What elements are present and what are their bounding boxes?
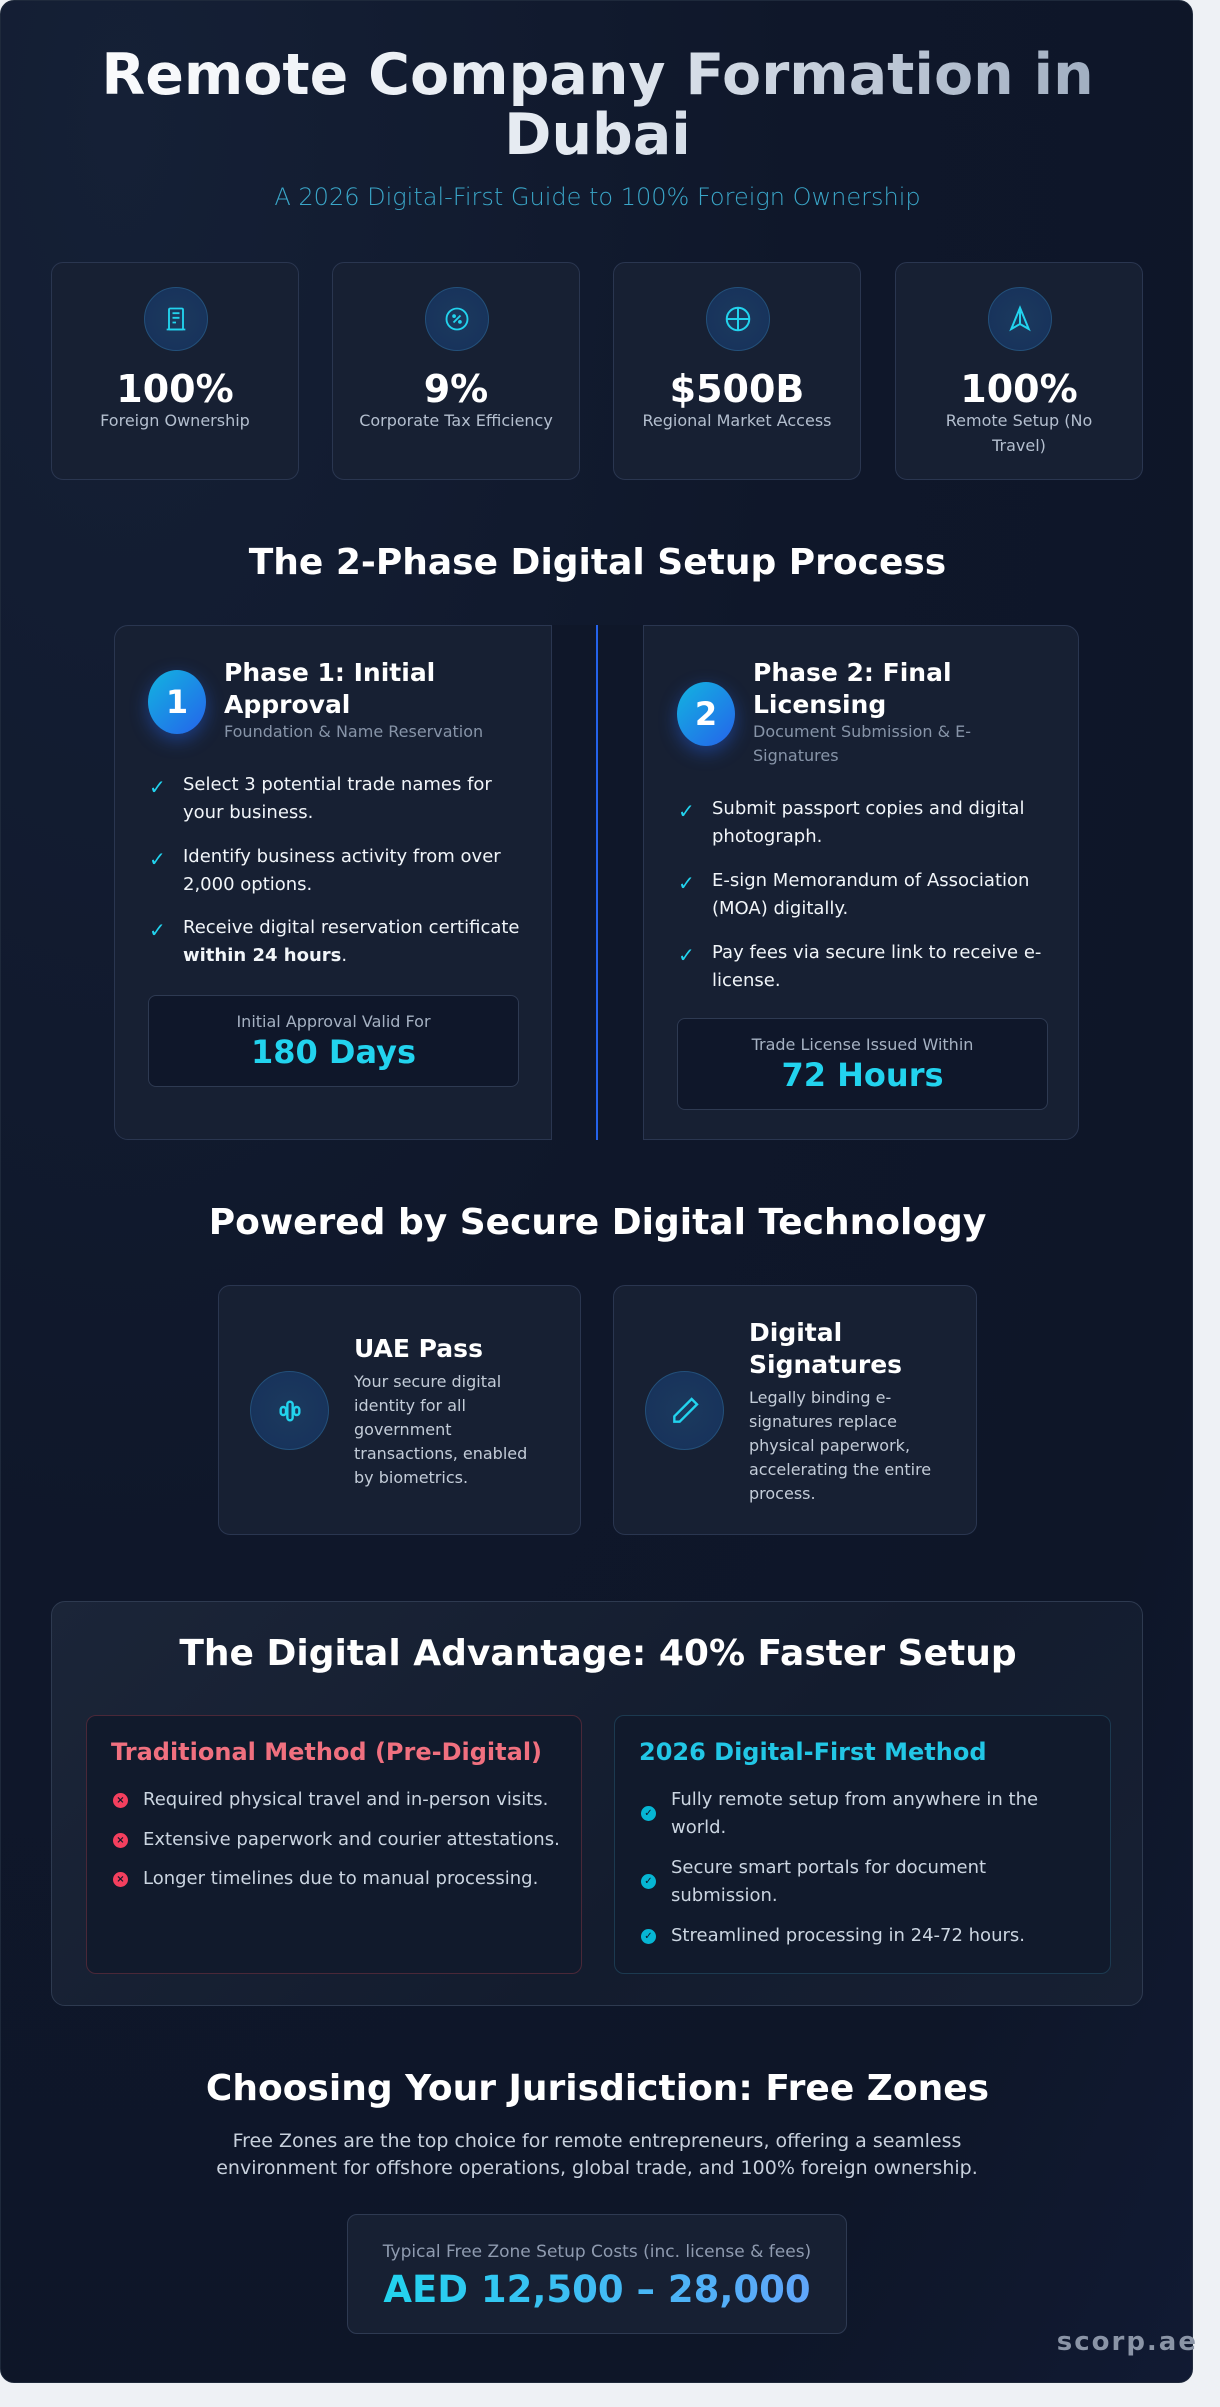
phase 1 heading: Approval xyxy=(224,690,350,719)
callout: 180 days: Initial Approval Valid For xyxy=(236,1012,431,1031)
watermark: scorp.ae xyxy=(1057,2327,1198,2357)
stat: foreign ownership: 100% xyxy=(116,367,234,411)
digital-first xyxy=(614,1715,1111,1974)
title: Remote Company Formation in xyxy=(101,42,1094,108)
panel: digital signatures: Digital xyxy=(749,1318,842,1347)
panel: phase 1: ✓ xyxy=(149,775,166,799)
icon: percent xyxy=(425,287,489,351)
traditional: × xyxy=(116,1835,125,1846)
panel: UAE Pass: Your secure digital identity for all government transactions, enabled by biometrics. xyxy=(354,1372,527,1487)
digital-first: 2026 Digital-First Method xyxy=(639,1738,987,1766)
badge 2 xyxy=(677,682,735,746)
panel: digital signatures xyxy=(613,1285,977,1535)
callout: 72 hours: Trade License Issued Within xyxy=(752,1035,973,1054)
stat: market: $500B xyxy=(670,367,804,411)
panel: digital signatures: Legally binding e-signatures replace physical paperwork, accelerating the entire process. xyxy=(749,1388,931,1503)
stat: remote xyxy=(895,262,1143,480)
phase 1 heading: Phase 1: Initial xyxy=(224,658,435,687)
timeline line xyxy=(552,625,643,1140)
panel: UAE Pass: UAE Pass xyxy=(354,1334,483,1363)
badge 1 xyxy=(148,670,206,734)
stat: remote: 100% xyxy=(960,367,1078,411)
panel: phase 2: E-sign Memorandum of Association (MOA) digitally. xyxy=(712,870,1029,919)
panel: digital signatures: Signatures xyxy=(749,1350,902,1379)
panel: digital advantage xyxy=(51,1601,1143,2006)
paragraph: Free Zones are the top choice for remote entrepreneurs, offering a seamless environment for offshore operations, global trade, and 100% foreign ownership. xyxy=(216,2130,978,2179)
stat: foreign ownership xyxy=(51,262,299,480)
traditional: × xyxy=(116,1874,125,1885)
icon: building xyxy=(144,287,208,351)
stat: market xyxy=(613,262,861,480)
callout: costs: Typical Free Zone Setup Costs (inc. license & fees) xyxy=(383,2242,811,2262)
panel: phase 1 xyxy=(114,625,552,1140)
heading: The Digital Advantage: 40% Faster Setup xyxy=(179,1633,1017,1674)
phase 2 heading: Licensing xyxy=(753,690,886,719)
panel: phase 1: Identify business activity from over 2,000 options. xyxy=(183,846,501,895)
digital-first: ✓ xyxy=(644,1876,653,1887)
phase 2 heading xyxy=(753,658,952,719)
panel: phase 2 xyxy=(643,625,1079,1140)
bullets: Select 3 potential trade names for your business. xyxy=(183,774,492,823)
digital-first: ✓ xyxy=(644,1808,653,1819)
phase 1 heading xyxy=(224,658,435,719)
title: Dubai xyxy=(504,102,691,168)
traditional: × xyxy=(116,1795,125,1806)
icon: pen xyxy=(645,1371,724,1450)
title xyxy=(1,45,1194,165)
badge 2: 2 xyxy=(695,695,717,733)
icon: plane xyxy=(988,287,1052,351)
heading: free zones: Choosing Your Jurisdiction: Free Zones xyxy=(206,2068,989,2109)
callout: 180 days: 180 Days xyxy=(251,1033,416,1071)
traditional: Extensive paperwork and courier attestations. xyxy=(143,1829,560,1850)
callout: costs xyxy=(347,2214,847,2334)
traditional: Traditional Method (Pre-Digital) xyxy=(111,1738,542,1766)
panel: phase 2: ✓ xyxy=(678,943,695,967)
callout: 72 hours: 72 Hours xyxy=(781,1056,944,1094)
phase 2 heading: Phase 2: Final xyxy=(753,658,952,687)
panel: phase 2: Pay fees via secure link to receive e-license. xyxy=(712,942,1041,991)
heading: 2-phase: The 2-Phase Digital Setup Process xyxy=(249,542,946,583)
subtitle: A 2026 Digital-First Guide to 100% Foreign Ownership xyxy=(274,183,921,211)
stat: tax: Corporate Tax Efficiency xyxy=(359,411,553,430)
panel: phase 1: ✓ xyxy=(149,918,166,942)
callout: 180 days xyxy=(148,995,519,1087)
digital-first: ✓ xyxy=(644,1931,653,1942)
panel: phase 2: ✓ xyxy=(678,871,695,895)
panel: phase 1: Receive digital reservation certificate within 24 hours. xyxy=(183,917,520,966)
callout: 72 hours xyxy=(677,1018,1048,1110)
panel: UAE Pass xyxy=(218,1285,581,1535)
panel: phase 2: ✓ xyxy=(678,799,695,823)
callout: costs: AED 12,500 – 28,000 xyxy=(383,2268,811,2311)
heading: technology: Powered by Secure Digital Technology xyxy=(209,1202,986,1243)
stat: market: Regional Market Access xyxy=(643,411,831,430)
icon: globe xyxy=(706,287,770,351)
badge 1: 1 xyxy=(166,683,188,721)
digital-first: Streamlined processing in 24-72 hours. xyxy=(671,1925,1025,1946)
panel: phase 1: Foundation & Name Reservation xyxy=(224,722,483,741)
stat: remote: Remote Setup (No Travel) xyxy=(946,411,1092,455)
digital-first: Secure smart portals for document submission. xyxy=(671,1857,986,1906)
traditional: Longer timelines due to manual processing. xyxy=(143,1868,538,1889)
icon: fingerprint xyxy=(250,1371,329,1450)
panel: phase 2: Document Submission & E-Signatures xyxy=(753,722,971,765)
digital-first: Fully remote setup from anywhere in the world. xyxy=(671,1789,1038,1838)
panel: phase 1: ✓ xyxy=(149,847,166,871)
bullets: Submit passport copies and digital photograph. xyxy=(712,798,1024,847)
stat: tax xyxy=(332,262,580,480)
traditional xyxy=(86,1715,582,1974)
stat: tax: 9% xyxy=(424,367,488,411)
stat: foreign ownership: Foreign Ownership xyxy=(100,411,250,430)
traditional: Required physical travel and in-person visits. xyxy=(143,1789,548,1810)
